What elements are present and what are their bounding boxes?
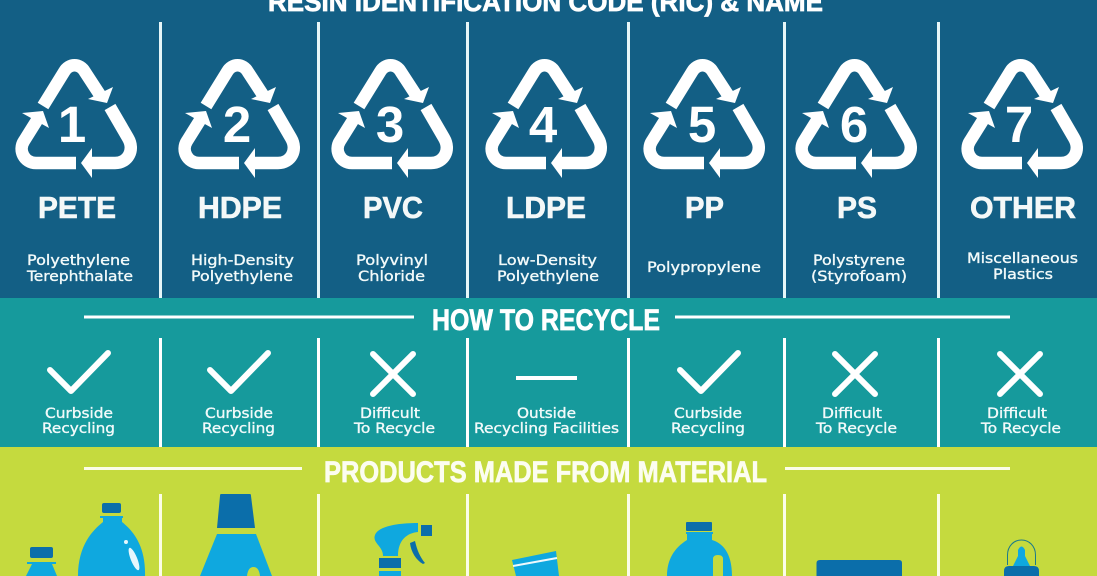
column: PVC: PVC (363, 190, 423, 225)
column: PETE: PETE (38, 190, 116, 225)
item: LDPE outside recycling facilities: Outside (517, 406, 576, 422)
item: PVC difficult to recycle (353, 354, 435, 437)
column: OTHER: OTHER (970, 190, 1076, 225)
item: PVC difficult to recycle: To Recycle (353, 421, 435, 437)
panel: resin identification code (0, 0, 1097, 298)
item: LDPE outside recycling facilities: Recycling Facilities (474, 421, 619, 437)
column: PP: 5 (688, 96, 716, 153)
column: PP (647, 65, 761, 276)
item: PVC difficult to recycle: Difficult (360, 406, 420, 422)
item: PP curbside recycling: Curbside (674, 406, 742, 422)
column: LDPE (492, 65, 601, 285)
column: PS: Polystyrene (813, 253, 905, 269)
icon: detergent bottle (200, 494, 272, 576)
heading: how to recycle: HOW TO RECYCLE (432, 304, 660, 337)
icon: milk jug (667, 522, 732, 576)
icon: small water bottle (26, 547, 57, 576)
heading: products made from material: PRODUCTS MADE FROM MATERIAL (324, 456, 767, 489)
item: PP curbside recycling: Recycling (671, 421, 745, 437)
column: HDPE: HDPE (198, 190, 282, 225)
item: other difficult to recycle (980, 354, 1061, 437)
item: HDPE curbside recycling: Curbside (205, 406, 273, 422)
column: OTHER: Plastics (993, 267, 1053, 283)
column: PP: Polypropylene (647, 260, 761, 276)
item: PETE curbside recycling: Curbside (45, 406, 113, 422)
column: LDPE: Low-Density (498, 253, 597, 269)
icon: plastic cup (512, 551, 559, 576)
column: PVC: 3 (376, 96, 404, 153)
item: PETE curbside recycling (42, 353, 115, 437)
column: LDPE: LDPE (506, 190, 586, 225)
item: PS difficult to recycle (815, 354, 897, 437)
column: PS: (Styrofoam) (811, 269, 907, 285)
column: OTHER: Miscellaneous (967, 251, 1078, 267)
item: PP curbside recycling (671, 353, 745, 437)
item: other difficult to recycle: To Recycle (980, 421, 1061, 437)
panel: how to recycle (0, 298, 1097, 447)
column: HDPE (185, 65, 294, 285)
column: PVC (338, 65, 447, 285)
column: OTHER: 7 (1005, 96, 1033, 153)
column: LDPE: 4 (529, 96, 558, 153)
column: PP: PP (685, 190, 724, 225)
column: OTHER (967, 65, 1078, 283)
column: PETE: Terephthalate (26, 269, 133, 285)
icon: large water jug (78, 503, 145, 576)
column: PS: 6 (840, 96, 868, 153)
column: PETE: 1 (58, 96, 86, 153)
item: other difficult to recycle: Difficult (987, 406, 1047, 422)
column: HDPE: High-Density (191, 253, 294, 269)
column: PS: PS (837, 190, 877, 225)
item: PS difficult to recycle: Difficult (822, 406, 882, 422)
column: PVC: Chloride (358, 269, 425, 285)
item: HDPE curbside recycling (202, 353, 275, 437)
item: PS difficult to recycle: To Recycle (815, 421, 897, 437)
column: PETE: Polyethylene (27, 253, 130, 269)
icon: spray bottle (374, 523, 432, 576)
column: PETE (22, 65, 133, 285)
column: HDPE: Polyethylene (191, 269, 293, 285)
item: PETE curbside recycling: Recycling (42, 421, 115, 437)
panel: products made from material (0, 447, 1097, 576)
item: HDPE curbside recycling: Recycling (202, 421, 275, 437)
icon: food tub (816, 560, 902, 576)
column: LDPE: Polyethylene (497, 269, 599, 285)
column: PS (802, 65, 911, 285)
icon: baby bottle (1004, 540, 1039, 576)
item: LDPE outside recycling facilities (474, 376, 619, 437)
column: PVC: Polyvinyl (356, 253, 428, 269)
column: HDPE: 2 (223, 96, 251, 153)
